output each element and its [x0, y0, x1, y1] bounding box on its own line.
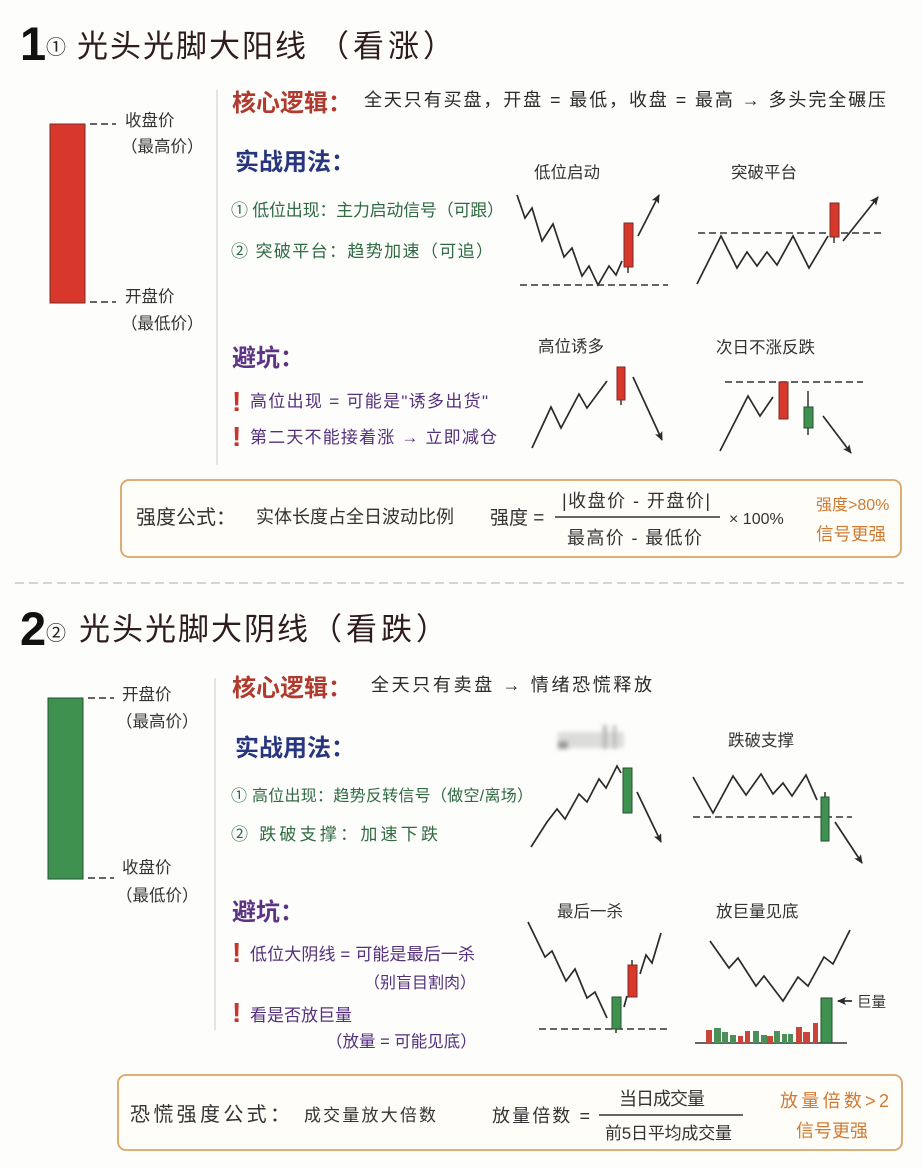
formula box 1 — [121, 480, 901, 557]
chart: high trap — [532, 337, 662, 448]
formula box 2: 当日成交量 — [619, 1089, 705, 1109]
chart: low start — [517, 163, 668, 285]
section 2 title: 2 — [20, 602, 46, 655]
chart: low start: 低位启动 — [534, 163, 600, 182]
chart: platform breakout: 突破平台 — [731, 163, 797, 182]
formula box 1: 强度 = — [490, 507, 544, 529]
core logic 2: 全天只有卖盘 → 情绪恐慌释放 — [371, 675, 652, 695]
usage 2 — [231, 735, 533, 844]
pitfalls 1: ! — [232, 386, 241, 417]
section 2 title — [20, 602, 451, 655]
large green candle diagram — [48, 685, 198, 905]
chart: high trap: 高位诱多 — [538, 337, 604, 356]
formula box 1: 最高价 - 最低价 — [567, 528, 702, 548]
large red candle diagram: （最高价） — [121, 137, 204, 156]
section 1 title: （看涨） — [318, 29, 458, 64]
chart: support break — [693, 731, 862, 863]
pitfalls 1: ! — [232, 421, 241, 452]
formula box 1: |收盘价 - 开盘价| — [562, 491, 710, 511]
chart: high reversal — [531, 766, 661, 847]
large green candle diagram: 开盘价 — [122, 685, 172, 704]
chart: huge volume bottom: 巨量 — [857, 995, 886, 1011]
pitfalls 1: 第二天不能接着涨 → 立即减仓 — [250, 428, 497, 447]
pitfalls 2: （放量 = 可能见底） — [326, 1032, 477, 1051]
blurred label placeholder — [558, 725, 624, 749]
pitfalls 2: ! — [232, 997, 241, 1028]
formula box 2: 放量倍数 = — [492, 1106, 590, 1126]
usage 1: ② 突破平台：趋势加速（可追） — [231, 242, 493, 261]
usage 2: ① 高位出现：趋势反转信号（做空/离场） — [231, 787, 533, 805]
section 2 title: 光头光脚大阴线 — [79, 612, 310, 647]
chart: support break: 跌破支撑 — [728, 731, 794, 750]
chart: huge volume bottom — [695, 902, 886, 1043]
formula box 1: 强度>80% — [816, 496, 889, 514]
large green candle diagram: 收盘价 — [122, 858, 172, 877]
pitfalls 2: 避坑： — [232, 899, 304, 926]
large red candle diagram — [50, 111, 204, 333]
section 1 title: ① — [46, 36, 66, 59]
core logic 2 — [232, 675, 652, 702]
chart: next day drop — [716, 338, 863, 453]
usage 2: ② 跌破支撑：加速下跌 — [231, 825, 438, 844]
pitfalls 1: 高位出现 = 可能是"诱多出货" — [250, 392, 488, 411]
pitfalls 2: ! — [232, 937, 241, 968]
large red candle diagram: 开盘价 — [125, 287, 174, 306]
pitfalls 2: 低位大阴线 = 可能是最后一杀 — [250, 945, 475, 964]
chart: platform breakout — [697, 163, 885, 284]
large red candle diagram: （最低价） — [121, 314, 204, 333]
pitfalls 1: 避坑： — [232, 345, 304, 372]
formula box 2: 放量倍数>2 — [780, 1091, 889, 1111]
large red candle diagram: 收盘价 — [125, 111, 174, 130]
usage 1 — [231, 149, 504, 261]
chart: final kill — [528, 902, 671, 1033]
core logic 1: 核心逻辑： — [232, 90, 352, 117]
formula box 1: 强度公式： — [136, 506, 236, 529]
chart: next day drop: 次日不涨反跌 — [716, 338, 815, 357]
section 1 title: 1 — [20, 17, 46, 70]
section 1 title — [20, 17, 458, 70]
core logic 2: 核心逻辑： — [232, 675, 352, 702]
chart: final kill: 最后一杀 — [557, 902, 623, 921]
formula box 1: 实体长度占全日波动比例 — [256, 507, 454, 527]
formula box 2: 恐慌强度公式： — [130, 1103, 290, 1126]
chart: huge volume bottom: 放巨量见底 — [716, 902, 798, 921]
core logic 1 — [232, 90, 886, 117]
section 2 title: ② — [46, 622, 66, 645]
pitfalls 2: （别盲目割肉） — [364, 974, 476, 992]
usage 2: 实战用法： — [235, 735, 355, 762]
section column rules — [215, 90, 217, 1030]
section 1 title: 光头光脚大阳线 — [77, 29, 308, 64]
section divider — [15, 582, 904, 584]
pitfalls 1 — [232, 345, 497, 452]
usage 1: ① 低位出现：主力启动信号（可跟） — [231, 201, 504, 220]
formula box 2 — [118, 1075, 902, 1150]
section 2 title: （看跌） — [311, 612, 451, 647]
formula box 2: 前5日平均成交量 — [605, 1124, 732, 1143]
formula box 1: × 100% — [729, 511, 784, 528]
pitfalls 2 — [232, 899, 477, 1051]
large green candle diagram: （最低价） — [116, 886, 198, 905]
formula box 2: 信号更强 — [796, 1121, 868, 1141]
core logic 1: 全天只有买盘，开盘 = 最低，收盘 = 最高 → 多头完全碾压 — [364, 90, 886, 110]
usage 1: 实战用法： — [235, 149, 355, 176]
formula box 1: 信号更强 — [816, 524, 886, 544]
large green candle diagram: （最高价） — [116, 712, 198, 731]
formula box 2: 成交量放大倍数 — [304, 1106, 436, 1125]
pitfalls 2: 看是否放巨量 — [250, 1006, 352, 1025]
